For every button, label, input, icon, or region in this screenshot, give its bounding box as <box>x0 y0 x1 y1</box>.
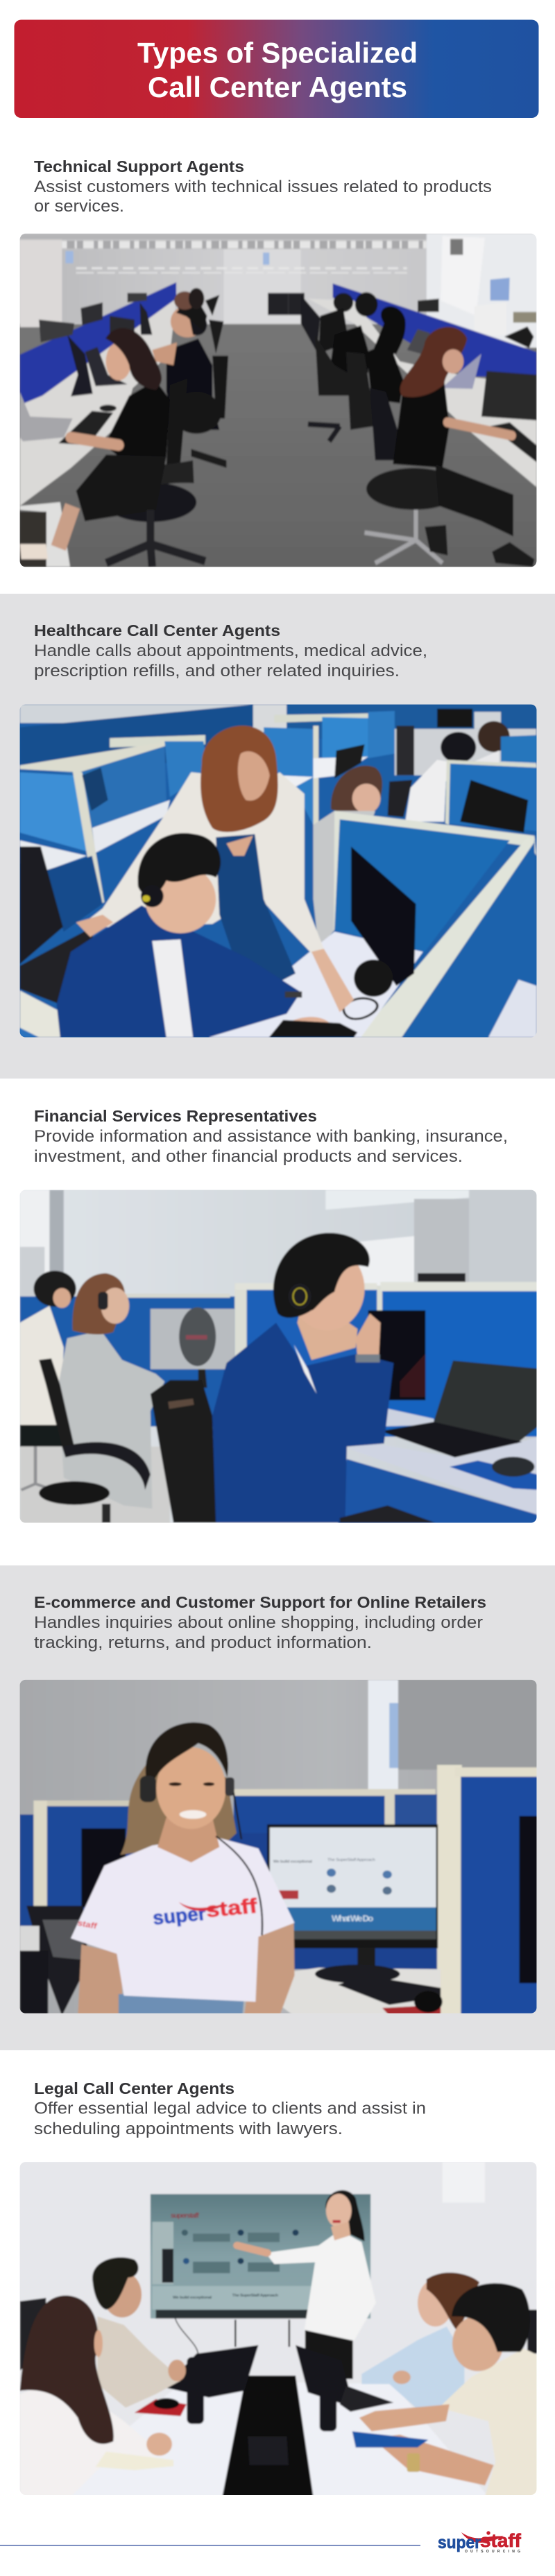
right row persons <box>301 292 406 441</box>
far right women <box>478 721 510 752</box>
text block: financial: investment, and other financial products and services. <box>34 1147 463 1166</box>
brand logo: OUTSOURCING <box>465 2550 520 2554</box>
woman <box>71 1722 294 2016</box>
panel: e-commerce and customer support <box>0 1565 555 2050</box>
shirt logo: staff <box>205 1894 259 1922</box>
woman seated mid <box>388 780 412 817</box>
man right front <box>352 2283 538 2496</box>
text block: legal: Offer essential legal advice to clients and assist in <box>34 2099 426 2118</box>
photo: agent on a call at desk <box>18 1188 538 1524</box>
shirt logo <box>153 1896 258 1927</box>
brand logo <box>438 2530 522 2554</box>
title banner: Types of Specialized <box>137 36 418 69</box>
text block: healthcare <box>34 621 427 680</box>
panel background <box>0 594 555 1079</box>
chair and lower-left frame <box>20 925 96 1004</box>
text block: e-commerce <box>34 1593 486 1652</box>
monitor: The SuperStaff Approach <box>327 1857 375 1862</box>
text block: e-commerce: E-commerce and Customer Support for Online Retailers <box>34 1593 486 1611</box>
cubicles <box>20 1814 35 1926</box>
right back cubicle <box>446 762 536 831</box>
partitions <box>20 1296 236 1427</box>
presenter <box>237 2190 376 2379</box>
monitor: We build exceptional <box>273 1860 312 1864</box>
text block: healthcare: prescription refills, and other related inquiries. <box>34 662 400 680</box>
desk and laptop <box>371 1438 537 1514</box>
shirt logo: super <box>152 1903 207 1929</box>
brand logo: super <box>438 2533 481 2552</box>
wall tv: We build exceptional <box>173 2296 212 2300</box>
text block: technical support <box>34 157 492 216</box>
back chair <box>20 2298 46 2371</box>
wall tv: superstaff <box>171 2213 199 2219</box>
seated agent <box>57 833 357 1037</box>
monitor: What We Do <box>332 1914 374 1923</box>
text block: healthcare: Healthcare Call Center Agents <box>34 621 280 639</box>
photo: smiling agent in company shirt <box>18 1678 540 2016</box>
text block: financial <box>34 1107 508 1166</box>
panel background <box>0 1565 555 2050</box>
text block: technical support: Technical Support Agents <box>34 157 244 175</box>
monitors <box>151 1307 425 1400</box>
mid cubicles <box>110 735 205 748</box>
left partition and desk <box>20 282 176 405</box>
monitor <box>267 1824 438 1973</box>
text block: healthcare: Handle calls about appointments, medical advice, <box>34 642 427 660</box>
text block: e-commerce: tracking, returns, and product information. <box>34 1633 372 1652</box>
woman right <box>361 2273 479 2410</box>
title banner <box>14 19 538 118</box>
text block: e-commerce: Handles inquiries about online shopping, including order <box>34 1613 483 1632</box>
brand logo: staff <box>480 2530 522 2551</box>
woman front left <box>20 2296 173 2496</box>
panel: legal call center agents <box>18 2079 538 2496</box>
laptops and bottles <box>135 2345 393 2431</box>
left cubicle <box>62 746 166 827</box>
background woman <box>39 1273 164 1522</box>
woman: staff <box>77 1918 99 1931</box>
wall tv: The SuperStaff Approach <box>232 2294 278 2298</box>
text block: financial: Provide information and assistance with banking, insurance, <box>34 1127 508 1146</box>
text block: legal <box>34 2079 426 2138</box>
panel: financial services representatives <box>18 1107 538 1524</box>
panel: technical support agents <box>18 157 538 569</box>
text block: legal: Legal Call Center Agents <box>34 2079 234 2097</box>
title banner: Call Center Agents <box>148 71 407 103</box>
back chairs <box>268 293 305 315</box>
photo: agents working in two rows <box>18 232 538 569</box>
supervisor <box>76 725 354 1012</box>
foreground chair <box>151 1380 216 1522</box>
text block: technical support: or services. <box>34 197 124 216</box>
front cubicle <box>334 811 536 930</box>
panel: healthcare call center agents <box>0 594 555 1079</box>
photo: team meeting with presenter <box>18 2161 538 2496</box>
left row persons <box>152 288 228 468</box>
background man <box>20 1271 170 1524</box>
text block: technical support: Assist customers with technical issues related to products <box>34 178 492 196</box>
right partition, desk <box>333 284 536 377</box>
photo: supervisor helping an agent at a cubicle <box>18 703 538 1038</box>
desk <box>282 1966 441 2013</box>
table <box>46 2380 488 2496</box>
man left <box>92 2258 186 2407</box>
wall tv <box>151 2194 370 2319</box>
text block: financial: Financial Services Representatives <box>34 1107 317 1125</box>
text block: legal: scheduling appointments with lawyers. <box>34 2120 343 2138</box>
chair <box>26 1906 89 2016</box>
foreground agent <box>212 1233 436 1522</box>
